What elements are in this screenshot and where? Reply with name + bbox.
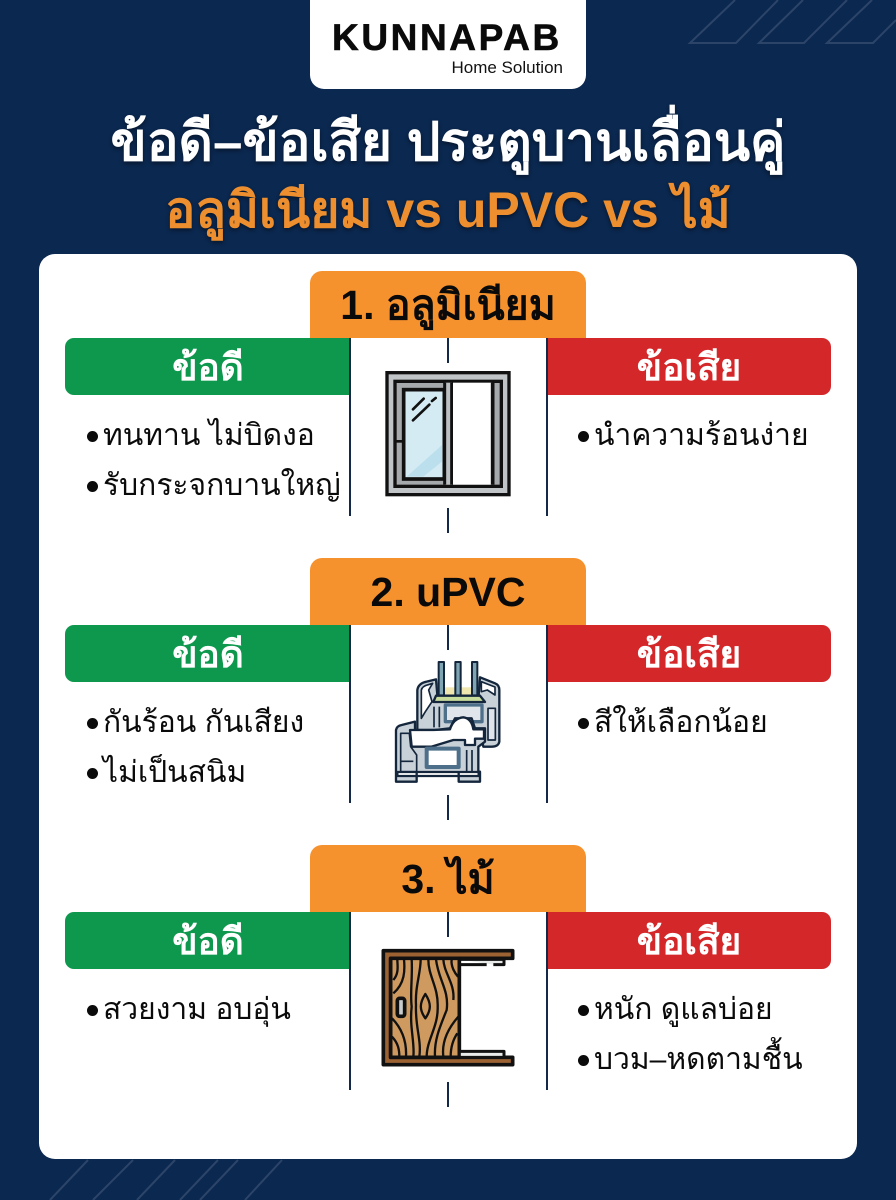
- subtitle: อลูมิเนียม vs uPVC vs ไม้: [165, 182, 731, 238]
- pros header: ข้อดี: [172, 347, 244, 388]
- cons header: [547, 338, 831, 395]
- icon: wooden sliding door: [382, 948, 514, 1066]
- title: ข้อดี–ข้อเสีย ประตูบานเลื่อนคู่: [110, 113, 786, 172]
- pros list: [87, 706, 304, 789]
- logo: Home Solution: [451, 58, 563, 77]
- pros header: [65, 912, 351, 969]
- cons header: [547, 625, 831, 682]
- heading: aluminium: [310, 271, 586, 338]
- pros header: [65, 338, 351, 395]
- icon: uPVC frame cross-section: [394, 661, 500, 783]
- heading: wood: 3. ไม้: [401, 856, 495, 902]
- pros list: รับกระจกบานใหญ่: [103, 469, 341, 502]
- pros list: [87, 418, 341, 502]
- pros list: กันร้อน กันเสียง: [103, 706, 304, 739]
- panel: aluminium: [65, 271, 831, 533]
- cons list: สีให้เลือกน้อย: [594, 706, 768, 739]
- panel: comparison card: [39, 254, 857, 1159]
- logo: KUNNAPAB: [332, 17, 562, 58]
- cons list: บวม–หดตามชื้น: [594, 1043, 803, 1076]
- heading: uPVC: [310, 558, 586, 625]
- pros list: สวยงาม อบอุ่น: [103, 993, 291, 1026]
- pros list: ทนทาน ไม่บิดงอ: [103, 419, 315, 452]
- cons header: ข้อเสีย: [637, 347, 741, 388]
- heading: uPVC: 2. uPVC: [371, 569, 525, 615]
- pros header: [65, 625, 351, 682]
- pros list: ไม่เป็นสนิม: [103, 756, 246, 789]
- cons header: ข้อเสีย: [637, 634, 741, 675]
- heading: aluminium: 1. อลูมิเนียม: [340, 282, 556, 328]
- pros header: ข้อดี: [172, 634, 244, 675]
- heading: wood: [310, 845, 586, 912]
- cons header: [547, 912, 831, 969]
- panel: wood: [65, 845, 831, 1107]
- panel: uPVC: [65, 558, 831, 820]
- cons header: ข้อเสีย: [637, 921, 741, 962]
- logo: [310, 0, 586, 89]
- cons list: นำความร้อนง่าย: [594, 419, 809, 452]
- cons list: หนัก ดูแลบ่อย: [594, 993, 773, 1026]
- icon: aluminium sliding window: [385, 371, 511, 496]
- cons list: [578, 993, 803, 1076]
- pros header: ข้อดี: [172, 921, 244, 962]
